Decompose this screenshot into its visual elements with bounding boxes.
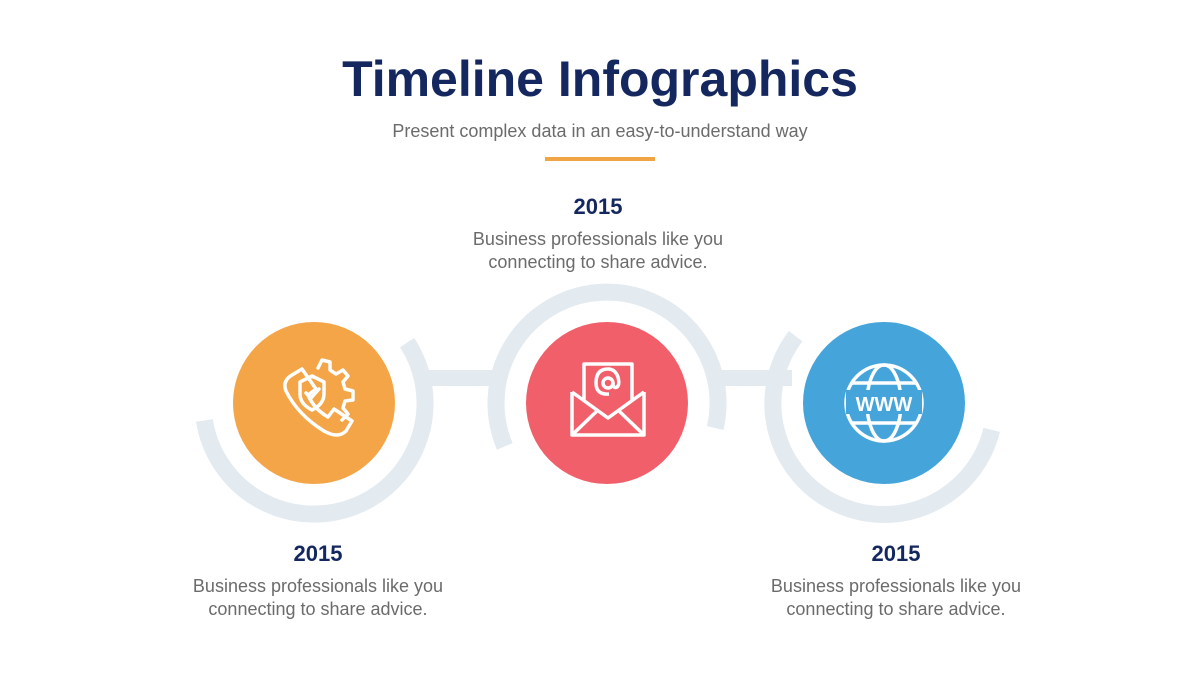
text block: left: connecting to share advice. — [208, 599, 428, 619]
text block: middle: Business professionals like you — [473, 229, 723, 249]
text block: right: 2015 — [872, 541, 920, 566]
text block: right — [771, 541, 1021, 619]
icon: blue circle with globe www: WWW — [856, 394, 912, 416]
ring arcs — [204, 292, 992, 514]
text block: left — [193, 541, 443, 619]
text block: middle: connecting to share advice. — [488, 252, 708, 272]
text block: left: 2015 — [294, 541, 342, 566]
text block: left: Business professionals like you — [193, 576, 443, 596]
icon: orange circle with gear/phone — [233, 322, 395, 484]
title: Timeline Infographics — [342, 51, 858, 107]
text block: middle: 2015 — [574, 194, 622, 219]
subtitle: Present complex data in an easy-to-understand way — [392, 121, 808, 141]
connector bars — [420, 370, 792, 386]
text block: right: connecting to share advice. — [786, 599, 1006, 619]
text block: right: Business professionals like you — [771, 576, 1021, 596]
icon: red circle with envelope — [526, 322, 688, 484]
text block: middle — [473, 194, 723, 272]
icon: blue circle with globe www — [803, 322, 965, 484]
accent line — [545, 157, 655, 161]
